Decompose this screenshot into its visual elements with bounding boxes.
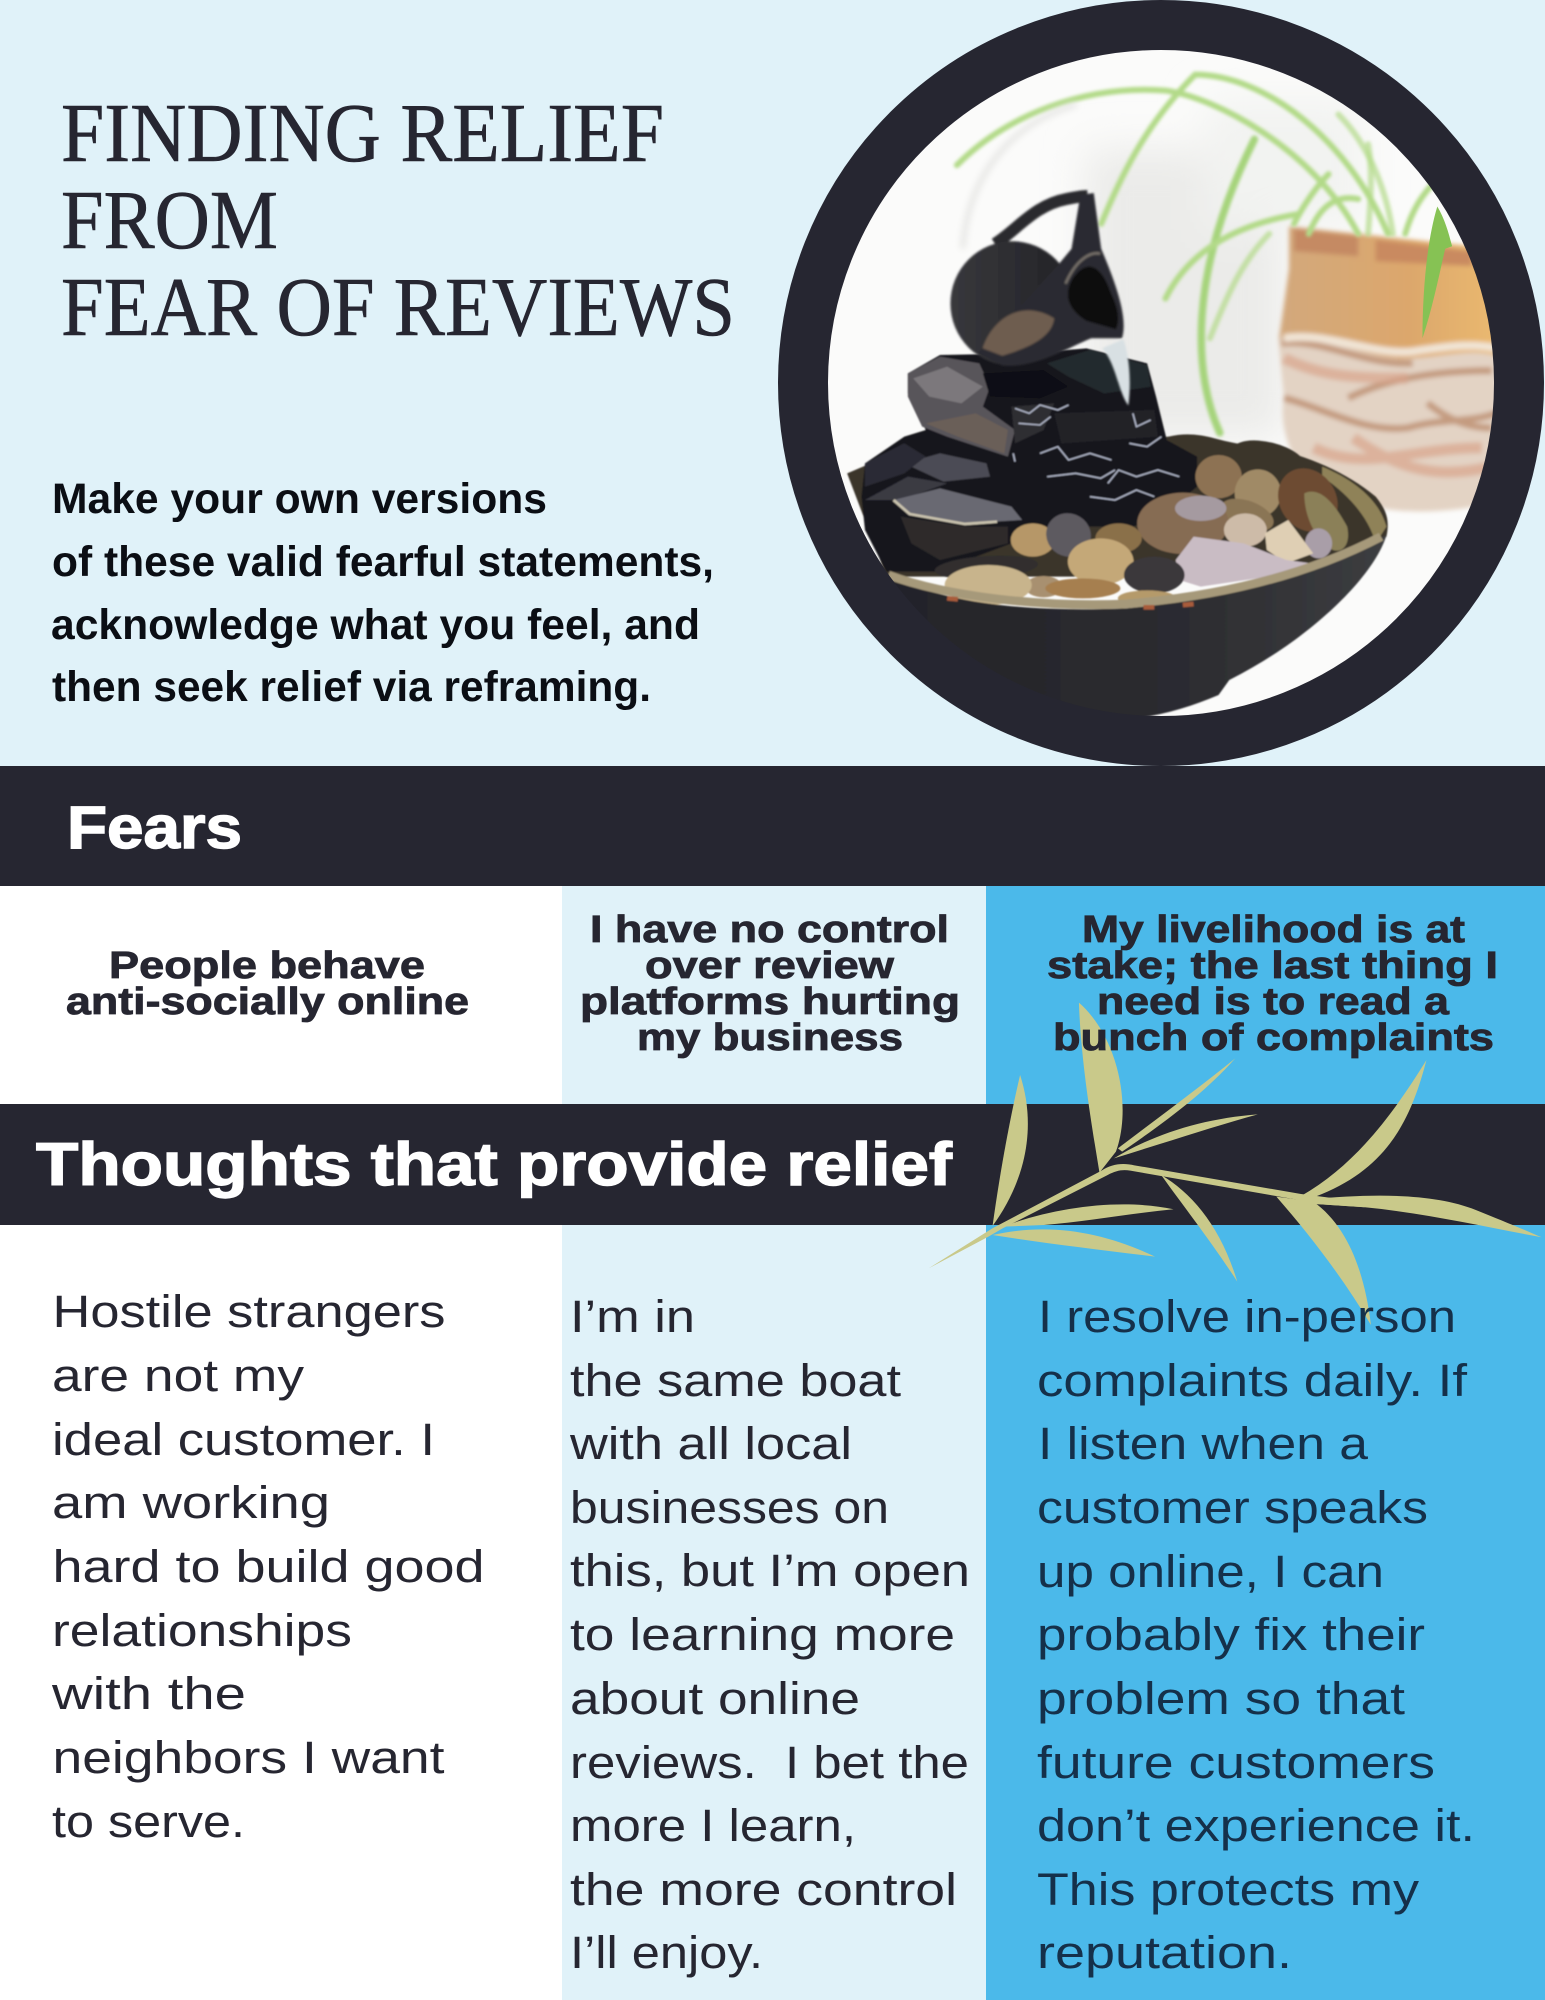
relief thought 3: I resolve in-person (1038, 1291, 1456, 1342)
fear 3: need is to read a (1097, 981, 1450, 1023)
relief thought 1 (51, 1286, 484, 1847)
photo fountain lower part (847, 348, 1388, 720)
photo water sparkles (1013, 405, 1179, 500)
photo slate rocks (861, 348, 1197, 572)
fear 2: platforms hurting (580, 981, 960, 1023)
relief thought 1: relationships (52, 1605, 352, 1656)
photo bowl rim front (888, 537, 1381, 605)
thoughts band: Thoughts that provide relief (36, 1131, 953, 1198)
column backgrounds (0, 886, 1545, 2000)
fear 1: People behave (109, 945, 425, 987)
title: FEAR OF REVIEWS (61, 261, 735, 354)
photo pebbles (1238, 439, 1300, 457)
fear 1 (66, 945, 469, 1023)
photo patterned pot (1279, 226, 1497, 511)
fears band: Fears (67, 794, 242, 861)
intro text: then seek relief via reframing. (52, 663, 651, 711)
title: FINDING RELIEF (61, 87, 664, 180)
fears band (0, 766, 1545, 886)
relief thought 2: about online (570, 1673, 860, 1724)
relief thought 3: up online, I can (1037, 1546, 1384, 1597)
intro text: acknowledge what you feel, and (51, 601, 700, 649)
title (61, 87, 735, 354)
photo faint grey stems (963, 104, 1076, 249)
relief thought 2: more I learn, (570, 1800, 856, 1851)
fear 3: My livelihood is at (1082, 909, 1465, 951)
relief thought 3 (1037, 1291, 1475, 1978)
photo sharp green blade (1422, 206, 1452, 338)
relief thought 3: problem so that (1037, 1673, 1406, 1724)
relief thought 2: the more control (570, 1864, 957, 1915)
fear 2: I have no control (590, 909, 949, 951)
relief thought 2 (569, 1291, 970, 1978)
relief thought 3: customer speaks (1037, 1482, 1428, 1533)
fear 3 (1047, 909, 1498, 1059)
relief thought 3: complaints daily. If (1037, 1355, 1468, 1406)
relief thought 2: to learning more (570, 1609, 955, 1660)
photo: tabletop water fountain with plant (828, 50, 1494, 716)
photo black bowl (886, 535, 1386, 720)
thoughts band (0, 1104, 1545, 1225)
fear 2: my business (637, 1017, 903, 1059)
relief thought 3: I listen when a (1038, 1418, 1369, 1469)
relief thought 2: this, but I’m open (570, 1545, 970, 1596)
circular dark photo frame (803, 25, 1519, 741)
fear 1: anti-socially online (66, 981, 469, 1023)
relief thought 2: reviews. I bet the (570, 1737, 969, 1788)
relief thought 3: reputation. (1037, 1927, 1292, 1978)
relief thought 3: don’t experience it. (1037, 1800, 1475, 1851)
relief thought 2: I’m in (570, 1291, 695, 1342)
relief thought 1: are not my (52, 1350, 305, 1401)
icon: olive bamboo branch (929, 1003, 1542, 1325)
header background panel (0, 0, 1545, 766)
photo bowl rim back (847, 434, 1388, 577)
relief thought 1: ideal customer. I (52, 1414, 435, 1465)
relief thought 2: businesses on (570, 1482, 889, 1533)
title: FROM (61, 174, 278, 267)
fear 2 (580, 909, 960, 1059)
relief thought 1: neighbors I want (52, 1732, 445, 1783)
fear 3: stake; the last thing I (1047, 945, 1498, 987)
photo pouring jug and water (950, 193, 1130, 405)
fear 3: bunch of complaints (1053, 1017, 1494, 1059)
relief thought 3: future customers (1037, 1737, 1435, 1788)
relief thought 1: to serve. (52, 1796, 245, 1847)
intro text (51, 475, 714, 711)
intro text: of these valid fearful statements, (52, 538, 714, 586)
relief thought 1: hard to build good (52, 1541, 484, 1592)
fear 2: over review (645, 945, 895, 987)
photo wall shading (1086, 124, 1339, 438)
photo spider plant leaves (957, 75, 1437, 433)
relief thought 2: I’ll enjoy. (570, 1927, 763, 1978)
intro text: Make your own versions (52, 475, 547, 523)
relief thought 1: with the (51, 1668, 246, 1719)
relief thought 3: This protects my (1037, 1864, 1420, 1915)
relief thought 2: with all local (569, 1418, 852, 1469)
relief thought 3: probably fix their (1037, 1609, 1425, 1660)
relief thought 1: Hostile strangers (52, 1286, 446, 1337)
relief thought 1: am working (52, 1477, 330, 1528)
relief thought 2: the same boat (570, 1355, 902, 1406)
